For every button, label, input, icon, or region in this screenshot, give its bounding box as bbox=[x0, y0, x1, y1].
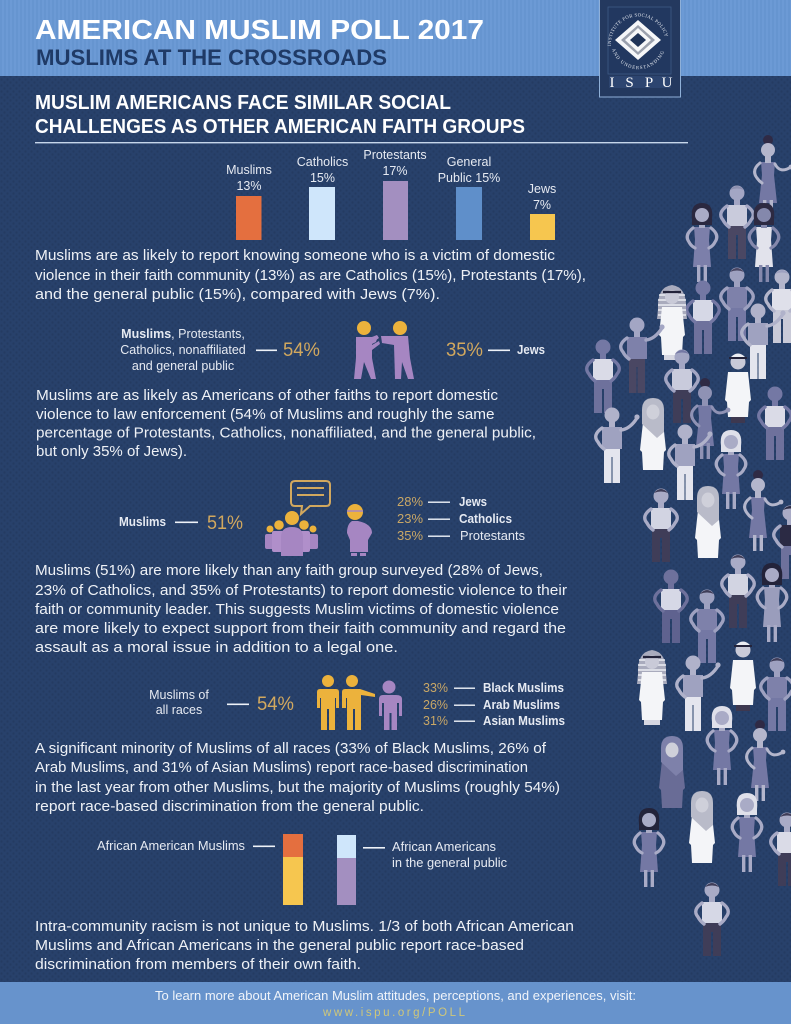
person bbox=[716, 430, 746, 509]
text block: paragraph 4: report race-based discrimination from the general public. bbox=[35, 798, 424, 815]
bar labels: Jews bbox=[528, 182, 556, 196]
text block: paragraph 2: violence to law enforcement (54% of Muslims and roughly the same bbox=[36, 406, 494, 423]
section heading: MUSLIM AMERICANS FACE SIMILAR SOCIAL bbox=[35, 92, 451, 114]
person bbox=[696, 882, 728, 956]
logo: ISPU: INSTITUTE FOR SOCIAL POLICY bbox=[608, 13, 668, 46]
text block: paragraph 1: and the general public (15%), compared with Jews (7%). bbox=[35, 286, 440, 303]
person bbox=[691, 590, 723, 663]
logo: ISPU: S bbox=[625, 75, 634, 91]
bar labels: Catholics bbox=[297, 155, 348, 169]
icon: two figures in altercation bbox=[354, 321, 414, 379]
diagram: race-based discrimination bbox=[149, 675, 565, 730]
title: AMERICAN MUSLIM POLL 2017 bbox=[35, 14, 484, 45]
value: 54%: 54% bbox=[283, 340, 320, 361]
person bbox=[771, 812, 791, 886]
bar labels: Muslims bbox=[226, 163, 272, 177]
bar labels: Public 15% bbox=[438, 171, 500, 185]
person bbox=[657, 285, 687, 360]
label: African Americans in the general public bbox=[392, 840, 507, 870]
comparison list: faith groups: Protestants bbox=[460, 529, 525, 543]
value: 51%: 51% bbox=[207, 513, 243, 534]
logo: ISPU: P bbox=[645, 75, 653, 91]
person bbox=[692, 378, 730, 459]
comparison list: races: 26% bbox=[423, 697, 448, 712]
value: 54%: 54% bbox=[257, 694, 294, 715]
person bbox=[774, 506, 791, 579]
logo: ISPU: U bbox=[662, 75, 673, 91]
bar labels: 7% bbox=[533, 198, 551, 212]
diagram: reporting to law enforcement bbox=[120, 321, 545, 379]
text block: paragraph 1: Muslims are as likely to report knowing someone who is a victim of domestic bbox=[35, 247, 555, 264]
comparison list: faith groups: Catholics bbox=[459, 512, 512, 526]
text block: paragraph 2: but only 35% of Jews). bbox=[36, 443, 187, 460]
bar labels: Protestants bbox=[363, 148, 427, 162]
bar: Protestants 17% bbox=[383, 181, 408, 240]
label: Muslims and others: and general public bbox=[132, 359, 234, 373]
person bbox=[596, 408, 640, 483]
person bbox=[666, 350, 698, 423]
bar labels: 15% bbox=[310, 171, 335, 185]
person bbox=[689, 791, 715, 863]
person bbox=[707, 706, 737, 785]
person bbox=[759, 386, 791, 460]
text block: paragraph 5: Intra-community racism is not unique to Muslims. 1/3 of both African American bbox=[35, 918, 574, 935]
person bbox=[749, 203, 779, 282]
icon: speech bubble bbox=[291, 481, 330, 514]
bar: Catholics 15% bbox=[309, 187, 335, 240]
bar: Jews 7% bbox=[530, 214, 555, 240]
person bbox=[761, 658, 791, 731]
comparison list: races: Arab Muslims bbox=[483, 698, 560, 712]
person bbox=[637, 650, 667, 725]
person bbox=[742, 304, 786, 379]
comparison list: races bbox=[423, 680, 565, 728]
subtitle: MUSLIMS AT THE CROSSROADS bbox=[36, 45, 387, 70]
section heading bbox=[35, 92, 525, 138]
label: Muslims of all races bbox=[149, 688, 209, 717]
person bbox=[645, 488, 677, 562]
text block: paragraph 4: A significant minority of Muslims of all races (33% of Black Muslims, 26% of bbox=[35, 740, 547, 757]
label: Muslims and others: Muslims, Protestants, bbox=[121, 327, 245, 341]
bar labels: General bbox=[447, 155, 491, 169]
label: African American Muslims: African American Muslims bbox=[97, 839, 245, 853]
text block: paragraph 4: in the last year from other Muslims, but the majority of Muslims (roughly 54%) bbox=[35, 779, 560, 796]
footer link: www.ispu.org/POLL bbox=[322, 1007, 466, 1019]
comparison list: faith groups: 28% bbox=[397, 494, 423, 509]
comparison list: faith groups bbox=[397, 494, 525, 543]
person bbox=[587, 340, 619, 413]
text block: paragraph 5 bbox=[35, 918, 574, 973]
text block: paragraph 4: Arab Muslims, and 31% of Asian Muslims) report race-based discrimination bbox=[35, 759, 528, 776]
text block: paragraph 5: Muslims and African Americans in the general public report race-based bbox=[35, 937, 524, 954]
bar labels bbox=[226, 148, 556, 212]
person bbox=[732, 793, 762, 872]
person bbox=[655, 570, 687, 643]
person bbox=[747, 720, 785, 801]
text block: paragraph 4 bbox=[35, 740, 560, 815]
text block: paragraph 3: faith or community leader. This suggests Muslim victims of domestic violence bbox=[35, 601, 559, 618]
label: Muslims and others bbox=[120, 327, 246, 373]
header band bbox=[0, 0, 791, 76]
person bbox=[721, 268, 753, 341]
label: Jews: Jews bbox=[517, 343, 545, 357]
text block: paragraph 3: Muslims (51%) are more likely than any faith group surveyed (28% of Jews, bbox=[35, 562, 543, 579]
bar: African American Muslims bbox=[283, 834, 303, 905]
diagram: intra-community racism bars bbox=[97, 834, 507, 905]
person bbox=[745, 470, 783, 551]
text block: paragraph 1 bbox=[35, 247, 586, 303]
text block: paragraph 3: 23% of Catholics, and 35% of Protestants) to report domestic violence to their bbox=[35, 582, 567, 599]
person bbox=[687, 280, 719, 354]
comparison list: races: 33% bbox=[423, 680, 448, 695]
comparison list: races: Black Muslims bbox=[483, 681, 564, 695]
crowd illustration bbox=[587, 135, 791, 956]
person bbox=[621, 318, 665, 393]
icon: targeted figure bbox=[379, 680, 402, 730]
text block: paragraph 2 bbox=[36, 387, 536, 460]
label: Muslims and others: Catholics, nonaffiliated bbox=[120, 343, 246, 357]
icon: two figures pointing bbox=[317, 675, 375, 730]
person bbox=[687, 203, 717, 282]
text block: paragraph 2: percentage of Protestants, Catholics, nonaffiliated, and the general public, bbox=[36, 424, 536, 442]
label: African Americans in the general public: in the general public bbox=[392, 856, 507, 870]
comparison list: faith groups: 23% bbox=[397, 511, 423, 526]
text block: paragraph 2: Muslims are as likely as Americans of other faiths to report domestic bbox=[36, 387, 498, 404]
person bbox=[721, 186, 753, 259]
comparison list: races: 31% bbox=[423, 713, 448, 728]
bar labels: 13% bbox=[236, 179, 262, 193]
text block: paragraph 3: are more likely to expect support from their faith community and regard the bbox=[35, 620, 566, 637]
logo: ISPU: AND UNDERSTANDING bbox=[612, 49, 664, 70]
icon: group listening bbox=[265, 511, 318, 556]
person bbox=[659, 736, 685, 808]
text block: paragraph 3: assault as a moral issue in addition to a legal one. bbox=[35, 639, 398, 656]
person bbox=[695, 486, 721, 558]
label: African Americans in the general public: African Americans bbox=[392, 840, 496, 854]
logo: ISPU: I bbox=[610, 75, 614, 91]
footer text: To learn more about American Muslim attitudes, perceptions, and experiences, visit: bbox=[155, 988, 636, 1003]
bar labels: 17% bbox=[382, 164, 408, 178]
bar chart: knowing a victim of domestic violence bbox=[226, 148, 556, 240]
label: Muslims of all races: Muslims of bbox=[149, 688, 209, 702]
logo: ISPU bbox=[599, 0, 681, 98]
person bbox=[722, 554, 754, 628]
bar: General Public 15% bbox=[456, 187, 482, 240]
diagram: reporting to faith leaders bbox=[119, 481, 525, 556]
section heading: CHALLENGES AS OTHER AMERICAN FAITH GROUPS bbox=[35, 116, 525, 138]
icon: faith leader bbox=[347, 504, 372, 556]
person bbox=[669, 424, 713, 500]
comparison list: faith groups: 35% bbox=[397, 528, 423, 543]
text block: paragraph 5: discrimination from members of their own faith. bbox=[35, 956, 361, 973]
person bbox=[677, 656, 721, 731]
text block: paragraph 3 bbox=[35, 562, 567, 656]
value: 35%: 35% bbox=[446, 340, 483, 361]
label: Muslims: Muslims bbox=[119, 515, 166, 529]
person bbox=[725, 354, 751, 423]
text block: paragraph 1: violence in their faith community (13%) as are Catholics (15%), Protestants (17%), bbox=[35, 267, 586, 284]
person bbox=[634, 808, 664, 887]
person bbox=[766, 270, 791, 343]
footer band bbox=[0, 982, 791, 1024]
label: Muslims of all races: all races bbox=[156, 703, 202, 717]
comparison list: faith groups: Jews bbox=[459, 495, 487, 509]
person bbox=[755, 135, 791, 216]
bar: African Americans in the general public bbox=[337, 835, 356, 905]
person bbox=[730, 642, 756, 711]
bar: Muslims 13% bbox=[236, 196, 262, 240]
person bbox=[640, 398, 666, 470]
person bbox=[757, 563, 787, 642]
comparison list: races: Asian Muslims bbox=[483, 714, 565, 728]
